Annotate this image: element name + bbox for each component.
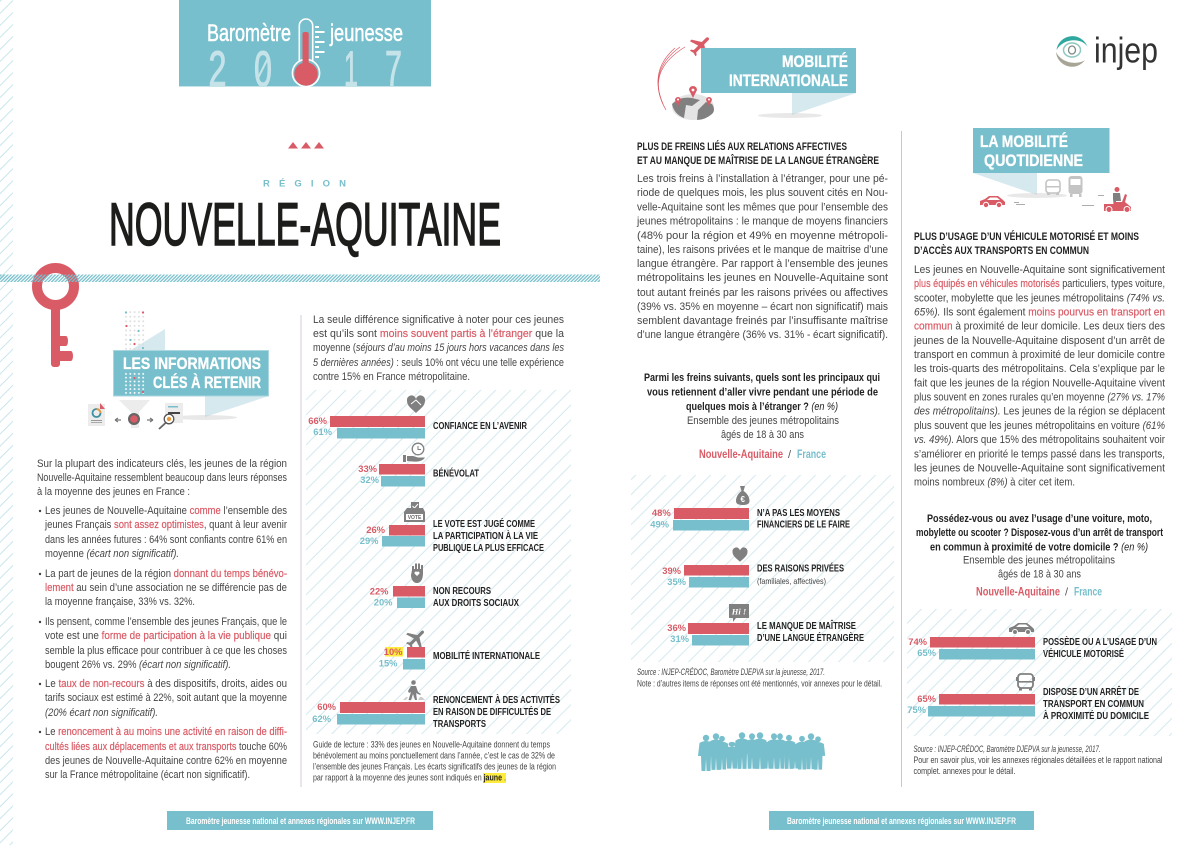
row: confiance en l'avenir: 66% xyxy=(308,415,328,426)
row: moyens financiers xyxy=(650,486,850,530)
row: véhicule motorisé: 65% xyxy=(917,647,937,658)
chart: key indicators xyxy=(306,390,571,734)
row: moyens financiers: 49% xyxy=(650,518,670,530)
question: freins: quelques mois à l’étranger ? (en %) xyxy=(686,401,838,413)
text block: introduction and key points: Sur la plupart des indicateurs clés, les jeunes de la région xyxy=(37,458,287,470)
text block: freins body: semblent davantage freinés par l’insuffisante maîtrise xyxy=(637,315,888,327)
text block: freins body: métropolitains les jeunes en Nouvelle-Aquitaine sont xyxy=(637,272,889,284)
text block: introduction and key points: Ils pensent, comme l’ensemble des jeunes Français, que le xyxy=(45,616,287,628)
text block: freins body: jeunes métropolitains : le manque de moyens financiers xyxy=(636,216,888,228)
header: Baromètre jeunesse 2017: 7 xyxy=(385,41,402,97)
text block: introduction and key points: La part de jeunes de la région donnant du temps bénévo- xyxy=(45,568,287,580)
text block: usage véhicule body xyxy=(913,264,1166,488)
text block: freins body: Les trois freins à l’installation à l’étranger, pour une pé- xyxy=(637,173,888,185)
row: renoncement xyxy=(312,680,560,730)
text block: usage véhicule heading xyxy=(914,230,1139,257)
reading guide: bénévolement au moins ponctuellement dans l’année, c’est le cas de 32% de xyxy=(313,750,555,760)
footer bar right xyxy=(769,811,1034,830)
question: véhicule et transport: en commun à proximité de votre domicile ? (en %) xyxy=(930,542,1148,554)
icons: car, bus, train, scooter xyxy=(980,176,1131,212)
text block: freins body: (48% pour la région et 49% en moyenne métropoli- xyxy=(637,230,888,242)
row: vote: LA PARTICIPATION À LA VIE xyxy=(433,529,538,542)
row: non recours: 20% xyxy=(374,596,393,608)
question: véhicule et transport: Nouvelle-Aquitaine xyxy=(976,586,1060,598)
banner: les informations clés à retenir: LES INFORMATIONS xyxy=(123,355,261,373)
reading guide: Guide de lecture : 33% des jeunes en Nouvelle-Aquitaine donnent du temps xyxy=(313,740,550,750)
text block: freins body xyxy=(636,173,889,341)
logo injep: injep xyxy=(1094,30,1158,70)
row: mobilité internationale xyxy=(379,624,540,670)
text block: usage véhicule body: les trois-quarts des métropolitains. Cela s’explique par le xyxy=(914,363,1165,375)
row: renoncement: RENONCEMENT À DES ACTIVITÉS xyxy=(433,693,560,706)
text block: introduction and key points: cultés liées aux déplacements et aux transports touche 60% xyxy=(45,741,287,753)
region label: RÉGION xyxy=(263,178,346,190)
text block: usage véhicule body: les jeunes de Nouvelle-Aquitaine sont significativement xyxy=(914,462,1166,474)
text block: usage véhicule heading: PLUS D’USAGE D’UN VÉHICULE MOTORISÉ ET MOINS xyxy=(914,230,1139,243)
icon: red key xyxy=(37,268,74,367)
question: véhicule et transport: Possédez-vous ou avez l’usage d’une voiture, moto, xyxy=(927,513,1152,525)
icon: plane and globe with pins xyxy=(658,30,716,120)
banner: la mobilité quotidienne: QUOTIDIENNE xyxy=(984,151,1083,170)
icons: document, funnel, magnifier xyxy=(88,400,183,429)
row: arrêt de transport: TRANSPORT EN COMMUN xyxy=(1043,699,1144,710)
row: langue étrangère: Hi ! xyxy=(731,606,746,616)
question: freins: vous retiennent d’aller vivre pendant une période de xyxy=(647,386,878,398)
row: non recours xyxy=(370,564,519,609)
banner: les informations clés à retenir xyxy=(114,310,269,420)
row: arrêt de transport: 65% xyxy=(917,693,937,704)
row: renoncement: 60% xyxy=(317,701,337,712)
header: Baromètre jeunesse 2017: 1 xyxy=(344,41,358,97)
row: moyens financiers: N’A PAS LES MOYENS xyxy=(757,508,840,519)
text block: introduction and key points: semble la plus efficace pour contribuer à ce que les choses xyxy=(45,645,287,657)
row: bénévolat: BÉNÉVOLAT xyxy=(433,466,480,480)
icon: crowd silhouette xyxy=(698,732,825,771)
row: vote: 26% xyxy=(366,524,386,535)
question: véhicule et transport xyxy=(916,513,1163,598)
text block: seule différence significative: moyenne (séjours d’au moins 15 jours hors vacances dans les xyxy=(313,342,564,354)
text block: freins body: (39% vs. 35% en moyenne – écart non significatif) mais xyxy=(637,301,888,313)
question: freins: âgés de 18 à 30 ans xyxy=(721,429,804,441)
row: raisons privées: 35% xyxy=(667,576,687,587)
text block: usage véhicule body: moins nombreux (8%) à citer cet item. xyxy=(914,476,1075,488)
text block: usage véhicule body: jeunes de la Nouvelle-Aquitaine disposent d’un arrêt de xyxy=(913,335,1165,347)
row: renoncement: EN RAISON DE DIFFICULTÉS DE xyxy=(433,705,551,718)
banner: mobilité internationale xyxy=(701,48,856,118)
row: mobilité internationale: 15% xyxy=(379,658,398,668)
logo injep xyxy=(1056,30,1158,70)
question: freins: / xyxy=(788,449,792,461)
text block: usage véhicule body: plus souvent en zones rurales qu’en moyenne (27% vs. 17% xyxy=(914,392,1165,404)
footer bar right: Baromètre jeunesse national et annexes régionales sur WWW.INJEP.FR xyxy=(787,816,1016,826)
row: non recours: 22% xyxy=(370,586,389,596)
row: arrêt de transport: DISPOSE D’UN ARRÊT DE xyxy=(1043,685,1139,698)
source note: freins: Source : INJEP-CRÉDOC, Baromètre DJEPVA sur la jeunesse, 2017. xyxy=(637,667,825,677)
row: bénévolat: 33% xyxy=(358,463,378,474)
question: freins: Parmi les freins suivants, quels sont les principaux qui xyxy=(644,372,880,384)
row: langue étrangère: D’UNE LANGUE ÉTRANGÈRE xyxy=(757,631,864,644)
text block: introduction and key points: lement au sein d’une association ne se différencie pas de xyxy=(45,582,287,594)
text block: usage véhicule body: commun à proximité de leur domicile. Les deux tiers des xyxy=(914,320,1165,332)
row: vote: 29% xyxy=(360,535,379,546)
text block: freins body: riode de quelques mois, les plus souvent cités en Nou- xyxy=(637,187,888,199)
row: mobilité internationale: 10% xyxy=(384,646,403,657)
text block: usage véhicule heading: D’ACCÈS AUX TRANSPORTS EN COMMUN xyxy=(914,244,1089,257)
text block: usage véhicule body: vs. 49%). Alors que 15% des métropolitains souhaitent voir xyxy=(914,434,1165,446)
column divider right xyxy=(901,131,902,787)
footer bar left: Baromètre jeunesse national et annexes régionales sur WWW.INJEP.FR xyxy=(186,816,415,826)
text block: freins body: d’une langue étrangère (36% vs. 31% - écart significatif). xyxy=(637,329,888,341)
text block: freins body: langue étrangère. Par rapport à l’ensemble des jeunes xyxy=(637,258,888,270)
row: renoncement: 62% xyxy=(312,713,332,724)
text block: introduction and key points: des jeunes de Nouvelle-Aquitaine contre 62% en moyenne xyxy=(45,755,287,767)
text block: seule différence significative: contre 15% en France métropolitaine. xyxy=(313,371,470,383)
text block: introduction and key points: Les jeunes de Nouvelle-Aquitaine comme l’ensemble des xyxy=(45,505,287,517)
banner: mobilité internationale: INTERNATIONALE xyxy=(729,71,848,90)
reading guide: par rapport à la moyenne des jeunes sont indiqués en jaune . xyxy=(313,772,506,782)
question: freins: Nouvelle-Aquitaine xyxy=(699,449,783,461)
row: véhicule motorisé: VÉHICULE MOTORISÉ xyxy=(1043,647,1124,660)
row: langue étrangère: LE MANQUE DE MAÎTRISE xyxy=(757,619,856,632)
row: raisons privées: 39% xyxy=(662,565,682,576)
chart: freins xyxy=(631,475,894,662)
text block: introduction and key points: sur la France métropolitaine (écart non significatif). xyxy=(45,769,250,781)
text block: seule différence significative xyxy=(313,314,565,383)
text block: freins heading: ET AU MANQUE DE MAÎTRISE DE LA LANGUE ÉTRANGÈRE xyxy=(637,154,879,167)
row: non recours: NON RECOURS xyxy=(433,586,491,597)
banner: les informations clés à retenir: CLÉS À RETENIR xyxy=(153,373,261,392)
header: Baromètre jeunesse 2017: 2 xyxy=(208,41,226,97)
hatched horizontal band xyxy=(0,274,600,282)
title: NOUVELLE-AQUITAINE xyxy=(109,190,501,258)
text block: seule différence significative: est qu’ils sont moins souvent partis à l’étranger que la xyxy=(313,328,565,340)
source note: freins xyxy=(637,667,882,688)
text block: usage véhicule body: s’améliorer en priorité le temps passé dans les transports, xyxy=(914,448,1165,460)
text block: introduction and key points: (20% écart non significatif). xyxy=(45,707,158,719)
banner: mobilité internationale: MOBILITÉ xyxy=(782,52,848,71)
row: confiance en l'avenir: CONFIANCE EN L’AVENIR xyxy=(433,421,527,432)
banner: la mobilité quotidienne: LA MOBILITÉ xyxy=(980,132,1068,151)
header: Baromètre jeunesse 2017: Baromètre xyxy=(207,20,291,47)
text block: usage véhicule body: 65%). Ils sont également moins pourvus en transport en xyxy=(914,306,1165,318)
text block: introduction and key points xyxy=(37,458,287,781)
row: vote: PUBLIQUE LA PLUS EFFICACE xyxy=(433,543,544,554)
text block: introduction and key points: tarifs sociaux est estimé à 22%, soit autant que la moyenne xyxy=(45,692,287,704)
reading guide: l’ensemble des jeunes Français. Les écarts significatifs des jeunes de la région xyxy=(313,762,556,772)
row: arrêt de transport: À PROXIMITÉ DU DOMICILE xyxy=(1043,709,1149,722)
row: arrêt de transport: 75% xyxy=(907,704,927,715)
text block: introduction and key points: dans les années futures : 64% sont confiants contre 61% en xyxy=(45,534,287,546)
footer bar left xyxy=(167,811,433,830)
row: langue étrangère: 36% xyxy=(667,622,687,633)
text block: introduction and key points: Nouvelle-Aquitaine ressemblent beaucoup dans leurs réponses xyxy=(37,472,287,484)
icon: three red triangles xyxy=(288,142,324,148)
question: freins xyxy=(644,372,880,461)
header: Baromètre jeunesse 2017: jeunesse xyxy=(329,20,403,47)
text block: usage véhicule body: scooter, mobylette que les jeunes métropolitains (74% vs. xyxy=(914,292,1165,304)
source note: véhicule et transport xyxy=(914,744,1163,776)
row: bénévolat xyxy=(358,443,480,486)
text block: freins body: taine), les raisons privées et le manque de maitrise d’une xyxy=(637,244,888,256)
text block: usage véhicule body: Les jeunes en Nouvelle-Aquitaine sont significativement xyxy=(914,264,1166,276)
source note: véhicule et transport: complet. annexes pour le détail. xyxy=(914,766,1016,776)
text block: introduction and key points: bougent 26% vs. 29% (écart non significatif). xyxy=(45,659,231,671)
row: bénévolat: 32% xyxy=(360,474,380,485)
text block: usage véhicule body: fait que les jeunes de la région Nouvelle-Aquitaine vivent xyxy=(914,378,1166,390)
row: moyens financiers: FINANCIERS DE LE FAIRE xyxy=(757,520,850,530)
header: Baromètre jeunesse 2017 xyxy=(179,0,431,97)
text block: introduction and key points: vote est une forme de participation à la vie publique qui xyxy=(45,630,287,642)
row: langue étrangère xyxy=(667,604,864,646)
row: renoncement: TRANSPORTS xyxy=(433,719,486,730)
reading guide xyxy=(313,740,556,783)
row: moyens financiers: € xyxy=(740,495,745,504)
text block: seule différence significative: 5 dernières années) : seuls 10% ont vécu une telle expérience xyxy=(313,357,564,369)
row: raisons privées xyxy=(662,547,844,588)
text block: introduction and key points: à la moyenne des jeunes en France : xyxy=(37,486,190,498)
row: raisons privées: (familiales, affectives) xyxy=(757,576,826,586)
text block: usage véhicule body: transport en commun à proximité de leur domicile contre xyxy=(914,349,1165,361)
row: vote: LE VOTE EST JUGÉ COMME xyxy=(433,517,535,530)
banner: la mobilité quotidienne xyxy=(973,128,1110,198)
header: Baromètre jeunesse 2017: 0 xyxy=(254,41,272,97)
row: arrêt de transport xyxy=(907,674,1149,722)
row: langue étrangère: 31% xyxy=(670,633,690,644)
question: véhicule et transport: France xyxy=(1074,586,1102,598)
row: vote xyxy=(360,502,544,554)
text block: freins heading xyxy=(637,140,879,167)
question: véhicule et transport: Ensemble des jeunes métropolitains xyxy=(963,554,1115,566)
row: confiance en l'avenir xyxy=(308,395,527,438)
text block: introduction and key points: moyenne (écart non significatif). xyxy=(45,548,179,560)
text block: freins body: velle-Aquitaine sont les mêmes que pour l’ensemble des xyxy=(637,202,888,214)
column divider left xyxy=(300,315,302,787)
question: véhicule et transport: / xyxy=(1065,586,1069,598)
text block: usage véhicule body: des métropolitains). Les jeunes de la région se déplacent xyxy=(914,406,1166,418)
row: raisons privées: DES RAISONS PRIVÉES xyxy=(757,562,844,574)
text block: usage véhicule body: plus souvent que les jeunes métropolitains en voiture (61% xyxy=(914,420,1165,432)
row: mobilité internationale: MOBILITÉ INTERNATIONALE xyxy=(433,649,540,662)
row: véhicule motorisé xyxy=(908,623,1157,660)
text block: introduction and key points: jeunes Français sont assez optimistes, quant à leur avenir xyxy=(44,519,287,531)
question: freins: Ensemble des jeunes métropolitains xyxy=(687,415,839,427)
left margin hatching xyxy=(0,0,13,845)
source note: freins: Note : d’autres items de réponses ont été mentionnés, voir annexes pour le détail. xyxy=(637,678,882,688)
question: freins: France xyxy=(797,449,826,461)
text block: freins body: tout autant freinés par les raisons privées ou affectives xyxy=(637,287,888,299)
row: non recours: AUX DROITS SOCIAUX xyxy=(433,598,519,609)
row: moyens financiers: 48% xyxy=(652,507,671,518)
source note: véhicule et transport: Source : INJEP-CRÉDOC, Baromètre DJEPVA sur la jeunesse, 2017. xyxy=(914,744,1100,754)
question: véhicule et transport: âgés de 18 à 30 ans xyxy=(998,568,1081,580)
row: véhicule motorisé: POSSÈDE OU A L’USAGE D’UN xyxy=(1043,635,1157,648)
row: confiance en l'avenir: 61% xyxy=(313,426,333,437)
text block: freins heading: PLUS DE FREINS LIÉS AUX RELATIONS AFFECTIVES xyxy=(637,140,847,153)
row: véhicule motorisé: 74% xyxy=(908,636,928,647)
text block: introduction and key points: Le taux de non-recours à des dispositifs, droits, aides ou xyxy=(45,678,287,690)
text block: seule différence significative: La seule différence significative à noter pour ces jeunes xyxy=(313,314,564,326)
text block: introduction and key points: Le renoncement à au moins une activité en raison de diffi- xyxy=(45,726,287,738)
icon: thermometer xyxy=(292,19,324,87)
row: vote: VOTE xyxy=(408,515,422,521)
chart: véhicule et transport xyxy=(907,609,1172,736)
text block: introduction and key points: la moyenne française, 33% vs. 32%. xyxy=(45,596,195,608)
text block: usage véhicule body: plus équipés en véhicules motorisés particuliers, types voiture, xyxy=(914,278,1165,290)
